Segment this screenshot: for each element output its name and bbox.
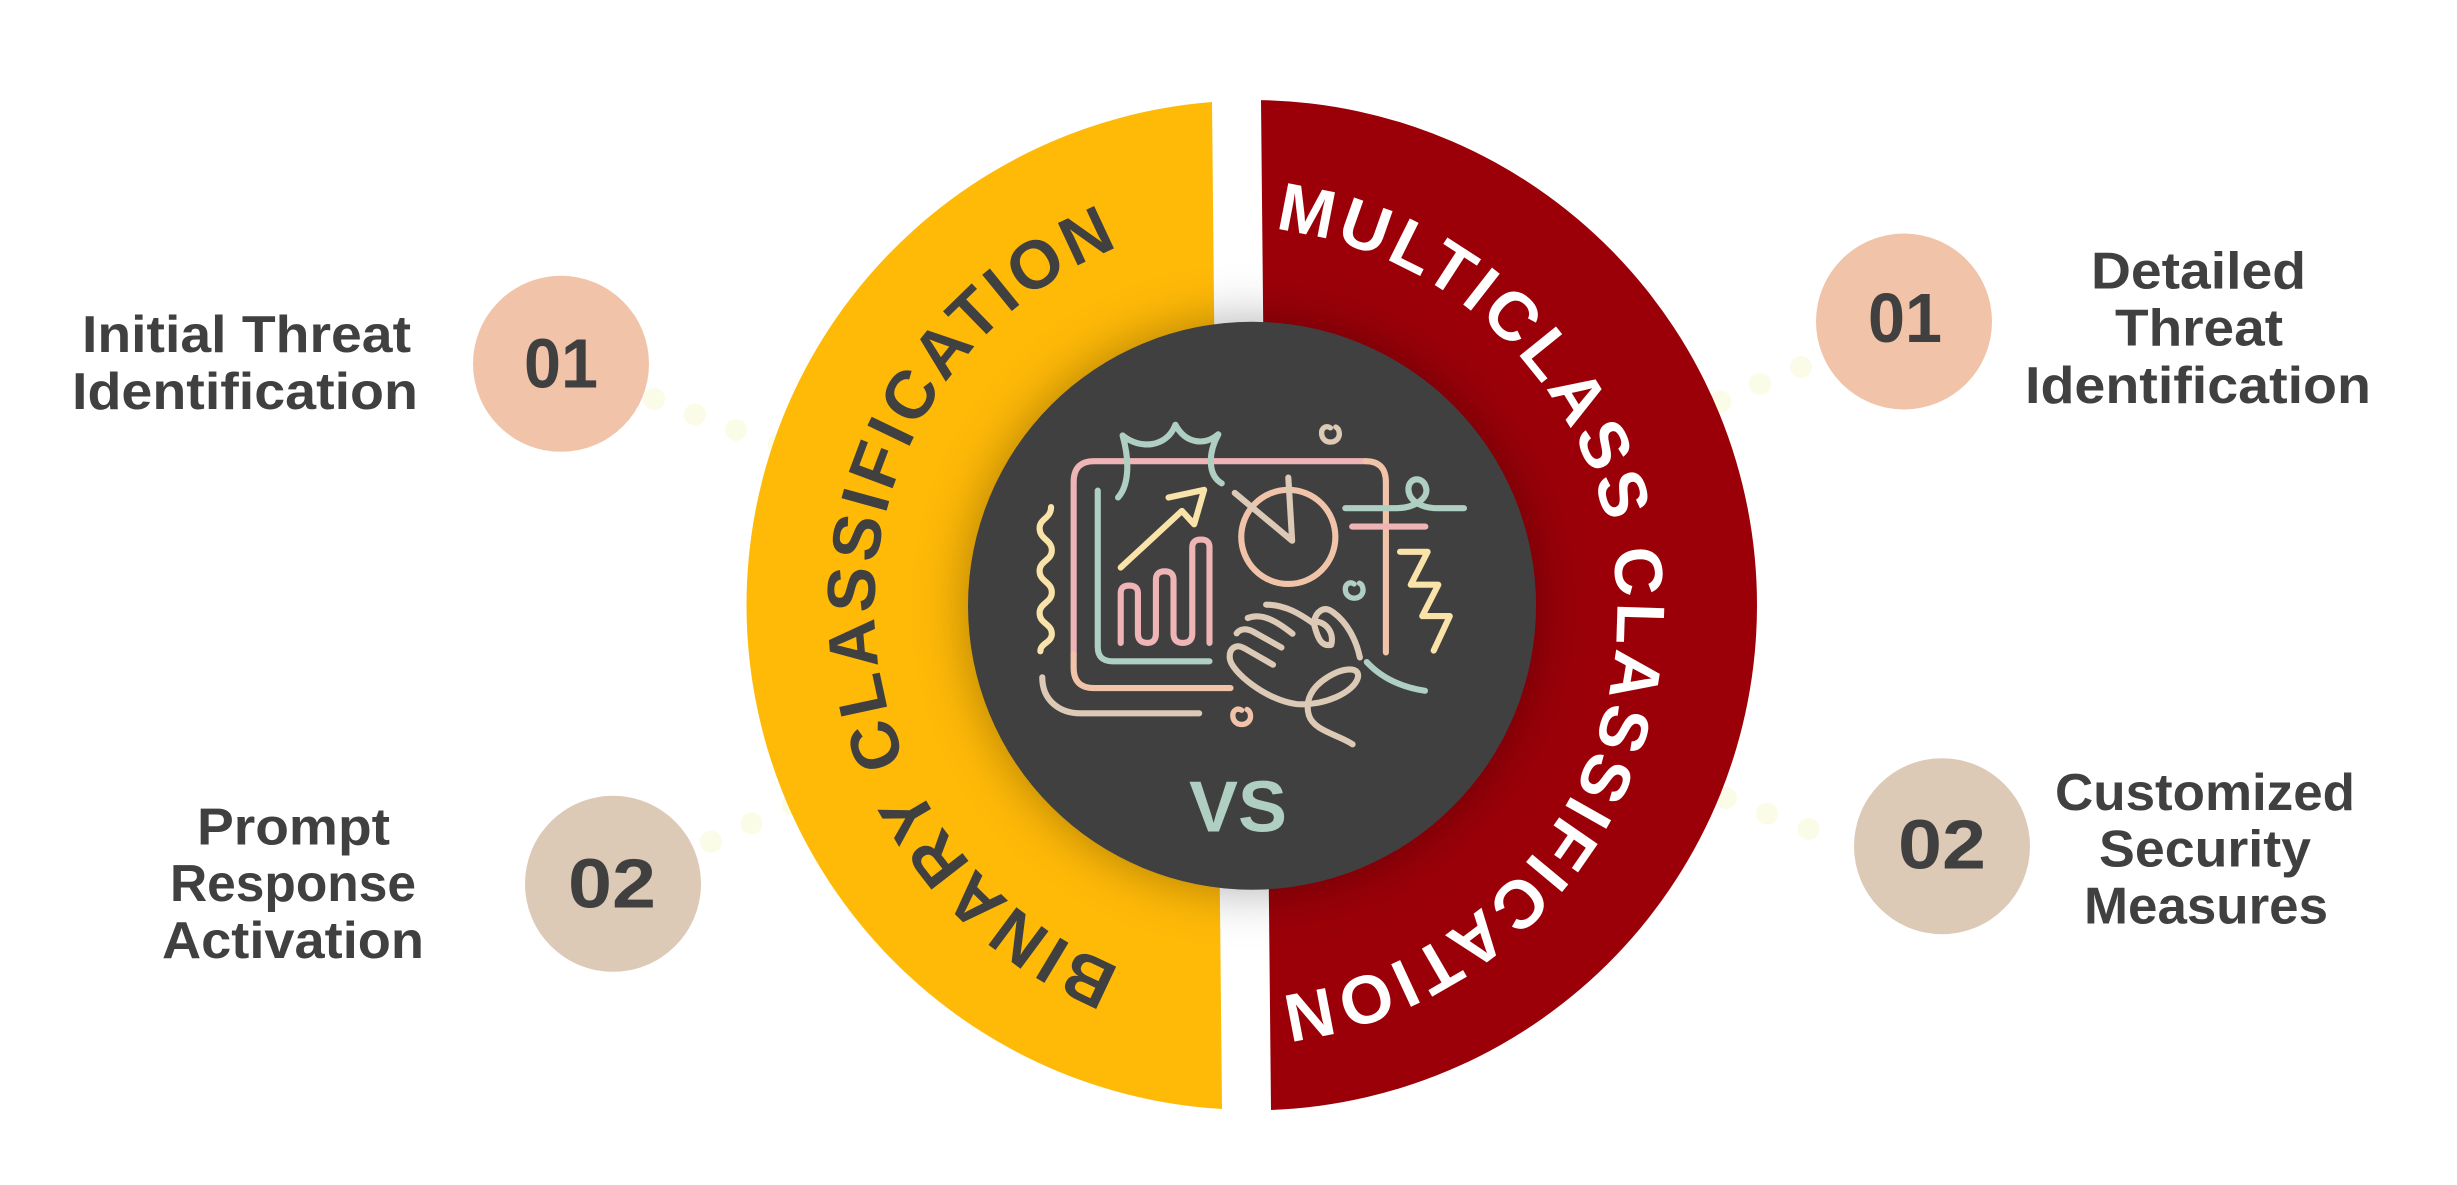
center dark circle bbox=[968, 322, 1536, 890]
text block: initial threat identification bbox=[72, 306, 418, 421]
connector dots: left 02 bbox=[700, 794, 804, 853]
text block: customized security measures: Customized bbox=[2055, 764, 2355, 822]
number badge: left 02: 02 bbox=[568, 845, 656, 923]
VS label: VS bbox=[1189, 768, 1287, 848]
text block: detailed threat identification: Identification bbox=[2025, 357, 2371, 415]
number badge: right 01 bbox=[1816, 234, 1992, 410]
panel: multiclass classification half ring bbox=[1261, 100, 1757, 1110]
text block: detailed threat identification bbox=[2025, 242, 2371, 415]
text block: detailed threat identification: Threat bbox=[2115, 299, 2283, 357]
number badge: right 02: 02 bbox=[1898, 806, 1986, 884]
curved heading: binary classification: BINARY CLASSIFICATION bbox=[827, 206, 1116, 1009]
number badge: left 01: 01 bbox=[524, 324, 598, 402]
number badge: right 01: 01 bbox=[1868, 279, 1942, 357]
number badge: right 02 bbox=[1854, 758, 2030, 934]
text block: detailed threat identification: Detailed bbox=[2091, 242, 2306, 300]
number badge: left 01 bbox=[473, 276, 649, 452]
text block: prompt response activation bbox=[162, 798, 424, 970]
text block: customized security measures bbox=[2055, 764, 2355, 936]
connector dots: right 02 bbox=[1715, 787, 1820, 840]
text block: prompt response activation: Activation bbox=[162, 912, 424, 970]
panel: binary classification half ring bbox=[746, 102, 1222, 1109]
text block: prompt response activation: Prompt bbox=[197, 798, 390, 856]
curved heading: multiclass classification: MULTICLASS CLASSIFICATION bbox=[1279, 183, 1664, 1042]
connector dots: left 01 bbox=[643, 388, 790, 455]
number badge: left 02 bbox=[525, 796, 701, 972]
connector dots: right 01 bbox=[1710, 356, 1812, 413]
text block: prompt response activation: Response bbox=[170, 855, 416, 913]
text block: initial threat identification: Initial Threat bbox=[82, 306, 411, 364]
text block: initial threat identification: Identification bbox=[72, 363, 418, 421]
text block: customized security measures: Measures bbox=[2084, 878, 2328, 936]
icon: analytics dashboard with hand bbox=[1040, 425, 1464, 744]
text block: customized security measures: Security bbox=[2099, 820, 2311, 878]
